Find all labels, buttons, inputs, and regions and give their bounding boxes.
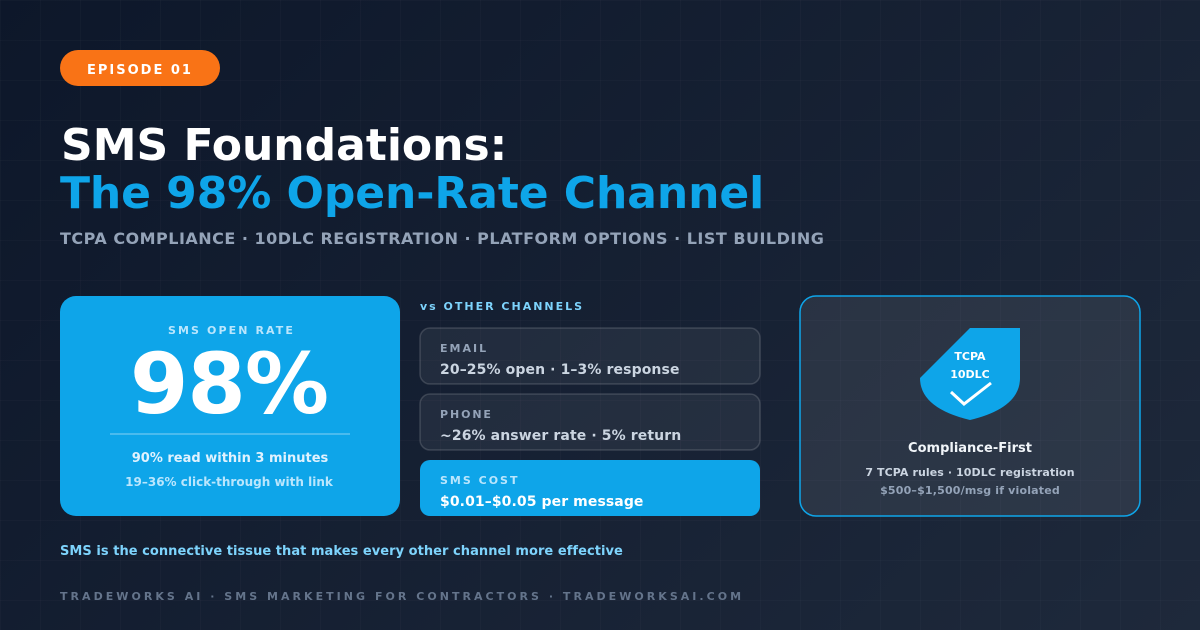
heading: compliance-first: Compliance-First	[908, 441, 1032, 456]
panel: compliance	[799, 295, 1141, 517]
panel: email	[419, 327, 761, 385]
panel: email: EMAIL	[440, 342, 488, 355]
subtitle: TCPA COMPLIANCE · 10DLC REGISTRATION · PLATFORM OPTIONS · LIST BUILDING	[60, 229, 824, 248]
icon: shield: 10DLC	[950, 368, 990, 381]
panel: phone: ~26% answer rate · 5% return	[440, 428, 681, 444]
big stat: 98%: 98%	[130, 335, 328, 433]
stat: read within 3 minutes: 90% read within 3 minutes	[132, 451, 328, 466]
icon: shield: TCPA	[954, 350, 986, 363]
panel: phone	[419, 393, 761, 451]
panel: SMS cost: $0.01–$0.05 per message	[440, 494, 644, 510]
stat: click-through: 19–36% click-through with link	[125, 475, 333, 489]
episode badge	[60, 50, 220, 86]
title	[60, 120, 764, 219]
heading: vs other channels: vs OTHER CHANNELS	[420, 300, 584, 313]
tagline: SMS is the connective tissue that makes every other channel more effective	[60, 544, 623, 559]
panel: SMS cost	[420, 460, 760, 516]
text: penalty: $500–$1,500/msg if violated	[880, 484, 1060, 497]
title: SMS Foundations:	[61, 120, 507, 171]
panel: SMS cost: SMS COST	[440, 474, 519, 487]
panel: phone: PHONE	[440, 408, 493, 421]
label: SMS open rate: SMS OPEN RATE	[168, 324, 295, 337]
icon: shield	[920, 328, 1020, 420]
panel: SMS open rate	[60, 296, 400, 516]
text: rules: 7 TCPA rules · 10DLC registration	[865, 466, 1075, 479]
footer: TRADEWORKS AI · SMS MARKETING FOR CONTRACTORS · TRADEWORKSAI.COM	[60, 590, 744, 603]
title: The 98% Open-Rate Channel	[60, 168, 764, 219]
episode badge: EPISODE 01	[87, 63, 193, 78]
panel: email: 20–25% open · 1–3% response	[440, 362, 680, 378]
